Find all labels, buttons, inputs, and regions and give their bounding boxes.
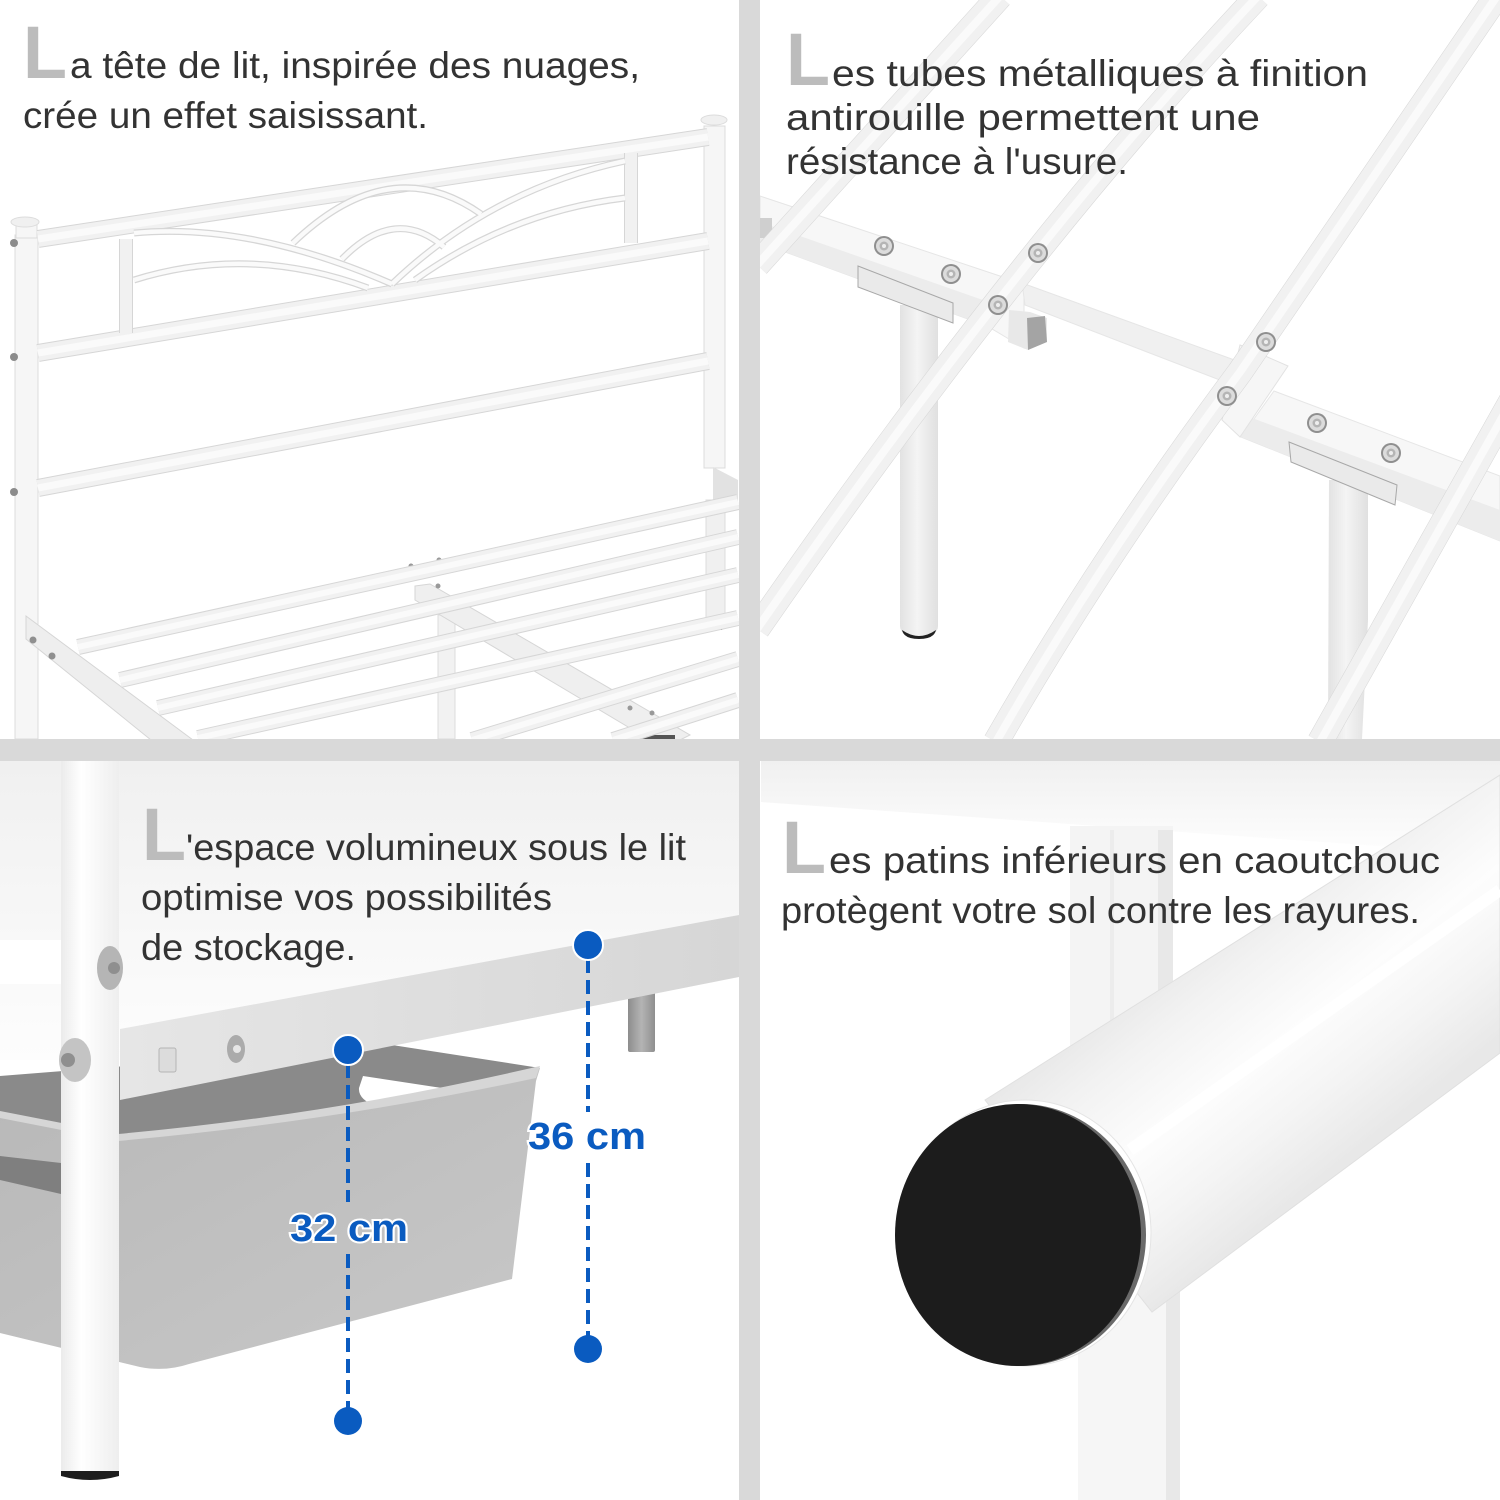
text: feet caption: es patins inférieurs en caoutchouc [829, 840, 1440, 881]
left rail [0, 940, 62, 984]
text: headboard caption: L [23, 11, 67, 94]
icon: rubber foot pad [895, 1100, 1151, 1366]
text: tube caption: es tubes métalliques à finition [832, 53, 1368, 94]
headboard rails [38, 137, 708, 488]
dimension: 32 cm: 32 cm [290, 1208, 408, 1250]
headboard uprights [126, 153, 631, 333]
side rail of the frame [26, 616, 193, 740]
text: tube caption: antirouille permettent une [786, 97, 1260, 138]
panel: rust-proof tubes [757, 0, 1500, 742]
icon: bolts and bracket [159, 1035, 245, 1072]
text: feet caption: L [782, 806, 826, 889]
icon: vertical tube lower [1078, 1280, 1180, 1500]
icon: front bed post [59, 761, 123, 1480]
icon: right bed post [701, 115, 738, 630]
text: feet caption: protègent votre sol contre les rayures. [781, 890, 1420, 931]
dimension: 36 cm: 36 cm [528, 1116, 646, 1158]
icon: bolts [874, 236, 1401, 463]
text: storage caption: optimise vos possibilités [141, 877, 552, 918]
icon: cloud motif curves [134, 161, 625, 288]
icon: storage basket [0, 1045, 540, 1369]
icon: mounting brackets [858, 266, 1397, 505]
top beam [761, 761, 1500, 847]
text: feet caption [781, 806, 1440, 931]
text: headboard caption [23, 11, 640, 136]
icon: left bed post [10, 217, 39, 739]
centre support beam and leg [408, 558, 690, 740]
text: storage caption: L [142, 793, 186, 876]
side rail band [120, 915, 739, 1100]
text: storage caption: de stockage. [141, 927, 356, 968]
cross beam [760, 196, 1500, 541]
text: tube caption: L [786, 18, 830, 101]
dimension: 36 cm [528, 930, 646, 1363]
icon: vertical tube upper [1070, 826, 1173, 1046]
panel: under-bed storage [0, 761, 739, 1500]
tubes [757, 0, 1500, 742]
icon: big tube [985, 775, 1500, 1312]
text: storage caption [141, 793, 687, 968]
bed slats [78, 502, 738, 740]
mattress [0, 761, 739, 1060]
panel: headboard [0, 0, 739, 740]
text: headboard caption: a tête de lit, inspirée des nuages, [70, 45, 640, 86]
dimension: 32 cm [290, 1035, 408, 1435]
panel: rubber feet [761, 761, 1500, 1500]
text: tube caption: résistance à l'usure. [786, 141, 1128, 182]
icon: small far leg [628, 970, 655, 1052]
text: tube caption [786, 18, 1368, 182]
text: storage caption: 'espace volumineux sous le lit [186, 827, 687, 868]
text: headboard caption: crée un effet saisissant. [23, 95, 428, 136]
icon: legs [900, 305, 1368, 739]
